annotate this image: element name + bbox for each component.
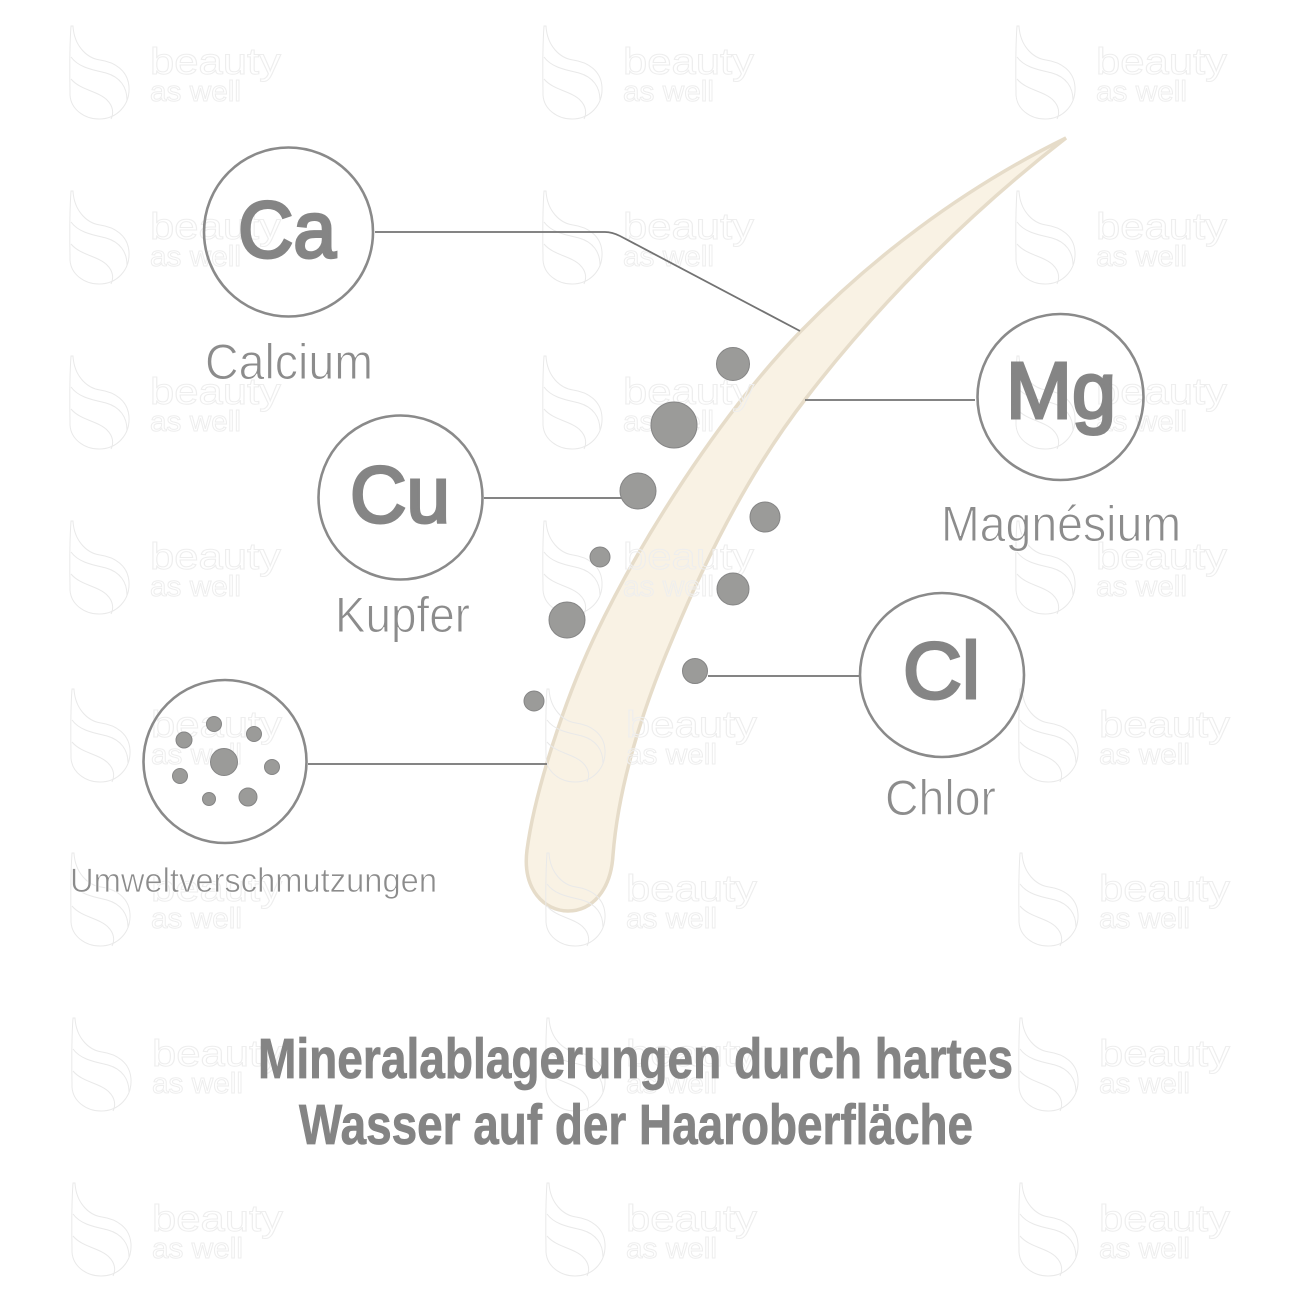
watermark grid: beauty <box>150 536 282 577</box>
watermark grid: as well <box>623 76 714 108</box>
watermark grid: beauty <box>150 371 282 412</box>
watermark grid: beauty <box>626 1033 758 1074</box>
element: calcium <box>204 148 373 390</box>
element: copper: Kupfer <box>335 587 470 643</box>
environmental pollutants: Umweltverschmutzungen <box>70 862 437 900</box>
element: chlorine <box>860 593 1024 826</box>
watermark grid: beauty <box>626 868 758 909</box>
watermark grid: as well <box>626 739 717 771</box>
watermark grid: as well <box>152 1068 243 1100</box>
watermark grid: as well <box>1096 241 1187 273</box>
watermark grid: beauty <box>1096 206 1228 247</box>
watermark grid: as well <box>151 739 242 771</box>
watermark grid: beauty <box>1099 868 1231 909</box>
watermark grid: beauty <box>152 1033 284 1074</box>
watermark grid: as well <box>1096 76 1187 108</box>
title: Wasser auf der Haaroberfläche <box>299 1093 973 1157</box>
element: magnesium: Mg <box>1006 346 1116 435</box>
environmental pollutants <box>70 680 437 900</box>
watermark grid: beauty <box>152 1198 284 1239</box>
watermark grid: beauty <box>1099 704 1231 745</box>
watermark grid: as well <box>626 1068 717 1100</box>
watermark grid: beauty <box>151 704 283 745</box>
watermark grid: beauty <box>626 704 758 745</box>
watermark grid: beauty <box>151 868 283 909</box>
watermark grid: as well <box>623 571 714 603</box>
watermark grid: as well <box>623 241 714 273</box>
watermark grid: beauty <box>1096 41 1228 82</box>
element: calcium: Calcium <box>205 334 373 390</box>
element: chlorine: Chlor <box>885 770 996 826</box>
watermark grid: beauty <box>626 1198 758 1239</box>
watermark grid: beauty <box>1096 536 1228 577</box>
watermark grid: as well <box>623 406 714 438</box>
watermark grid: beauty <box>150 41 282 82</box>
mineral particles <box>524 348 780 711</box>
connector: calcium to hair <box>375 232 800 331</box>
watermark grid: as well <box>150 571 241 603</box>
watermark grid: as well <box>1099 739 1190 771</box>
element: calcium: Ca <box>238 185 336 274</box>
watermark grid: beauty <box>623 371 755 412</box>
title: Mineralablagerungen durch hartes <box>258 1027 1013 1091</box>
element: magnesium: Magnésium <box>941 496 1181 552</box>
watermark grid: as well <box>152 1233 243 1265</box>
watermark grid: as well <box>626 903 717 935</box>
title <box>258 1027 1013 1157</box>
watermark grid: beauty <box>1099 1033 1231 1074</box>
watermark grid: beauty <box>1096 371 1228 412</box>
connector: magnesium to hair <box>805 399 975 401</box>
connector: pollutants to hair <box>308 763 547 765</box>
watermark grid: beauty <box>150 206 282 247</box>
connector: chlorine to particle <box>708 675 859 677</box>
watermark grid: beauty <box>623 41 755 82</box>
element: copper <box>318 416 482 643</box>
watermark grid: as well <box>1099 903 1190 935</box>
watermark grid: beauty <box>623 206 755 247</box>
watermark grid: beauty <box>1099 1198 1231 1239</box>
watermark grid: as well <box>1099 1068 1190 1100</box>
watermark grid: beauty <box>623 536 755 577</box>
element: chlorine: Cl <box>903 626 980 715</box>
connector: copper to particle <box>484 497 622 499</box>
watermark grid: as well <box>1096 571 1187 603</box>
watermark grid: as well <box>1096 406 1187 438</box>
watermark grid: as well <box>150 406 241 438</box>
watermark grid: as well <box>150 241 241 273</box>
element: copper: Cu <box>350 450 450 539</box>
watermark grid: as well <box>151 903 242 935</box>
watermark grid: as well <box>626 1233 717 1265</box>
watermark grid: as well <box>1099 1233 1190 1265</box>
element: magnesium <box>941 314 1181 552</box>
hair strand <box>526 138 1066 911</box>
watermark grid: as well <box>150 76 241 108</box>
